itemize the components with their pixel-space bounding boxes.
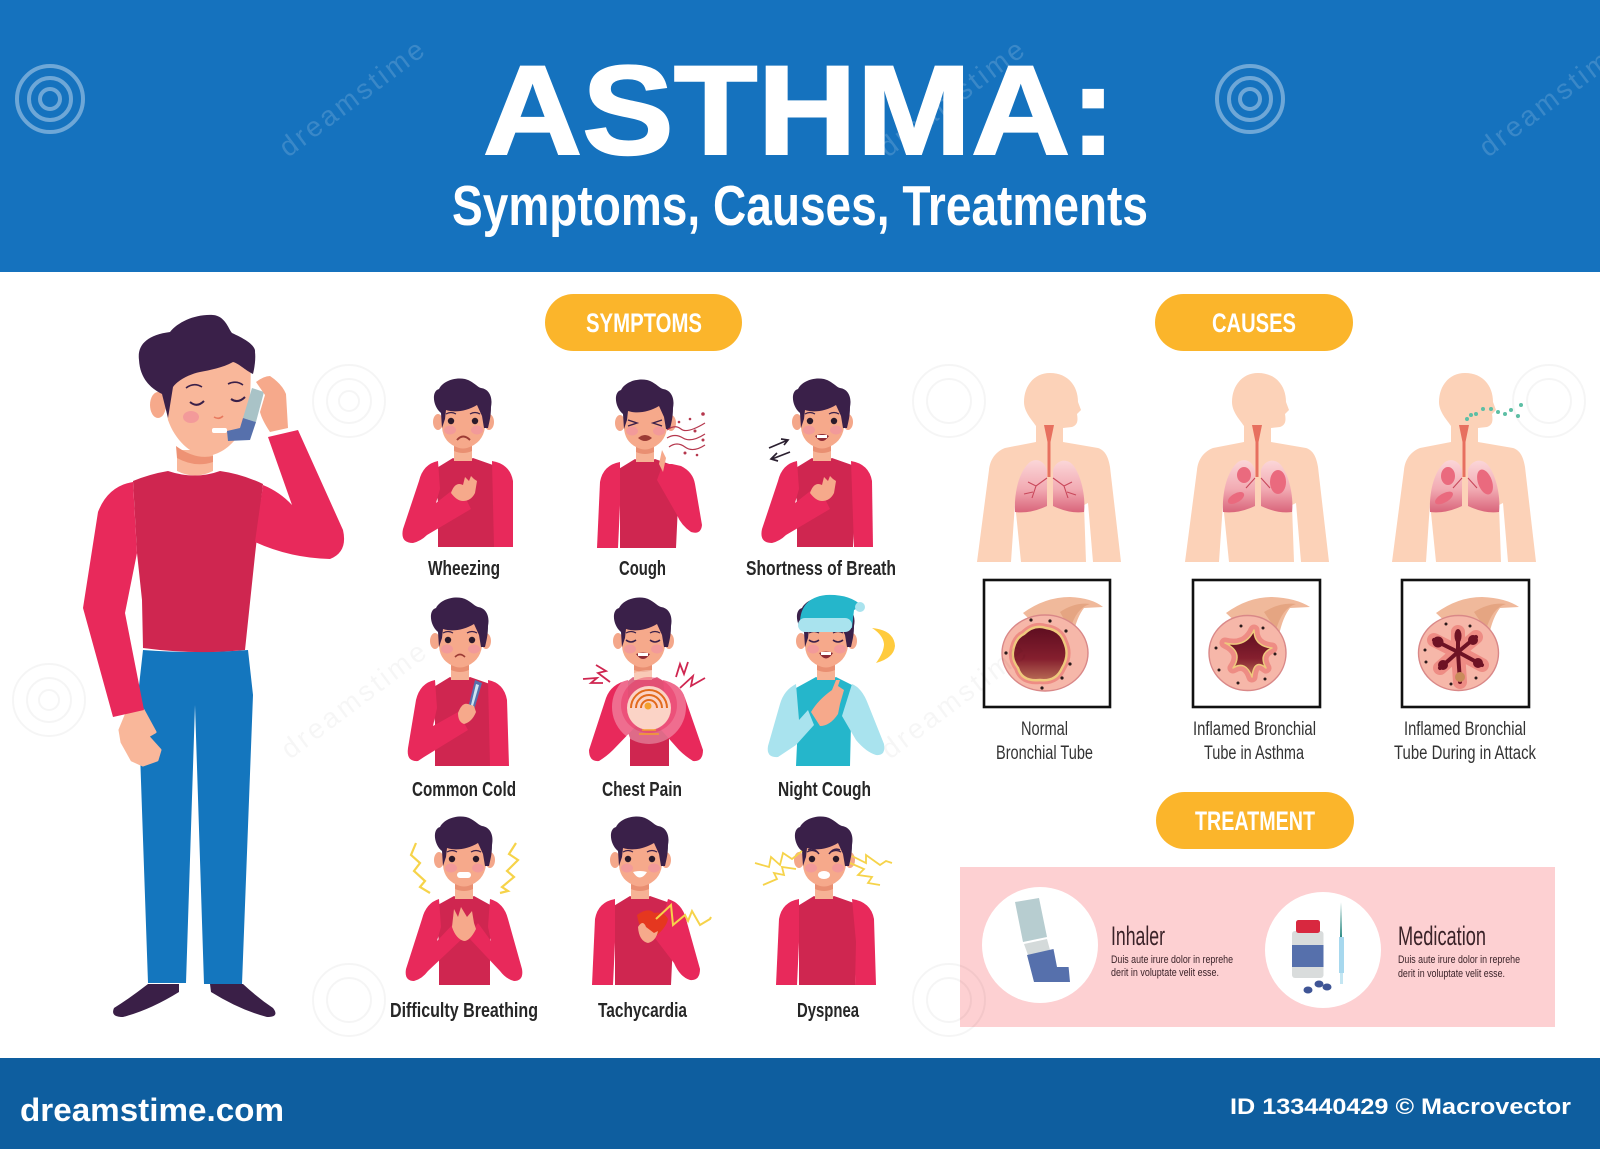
symptoms pill: SYMPTOMS: [586, 308, 702, 338]
symptom: chest pain: [583, 597, 705, 766]
body with inflamed lungs during attack: [1392, 373, 1536, 562]
footer brand: dreamstime.com: [20, 1092, 284, 1128]
symptom label: chest pain: Chest Pain: [602, 779, 682, 801]
symptom: difficulty breathing: [406, 816, 522, 985]
caption: inflamed bronchial tube in asthma: Inflamed Bronchial: [1193, 719, 1316, 740]
stress zigzags: [755, 851, 892, 885]
airborne particles: [1465, 403, 1523, 421]
footer credit: ID 133440429 © Macrovector: [1230, 1094, 1571, 1119]
normal bronchial tube box: [984, 580, 1110, 707]
thermometer: [468, 680, 482, 710]
symptoms pill: [545, 294, 742, 351]
causes pill: CAUSES: [1212, 308, 1296, 338]
moon: [872, 628, 895, 663]
upper hand: [256, 376, 288, 432]
heart: [637, 910, 668, 939]
symptom: dyspnea: [755, 816, 892, 985]
body with inflamed lungs: [1185, 373, 1329, 562]
caption: normal bronchial tube: Normal: [1021, 719, 1068, 740]
cough droplets: [667, 412, 705, 456]
inhaler: [227, 388, 264, 441]
symptom: tachycardia: [592, 816, 711, 985]
watermark text: dreamstime: [273, 32, 432, 163]
body with normal lungs: [977, 373, 1121, 562]
watermark text: dreamstime: [873, 32, 1032, 163]
torso: [133, 471, 263, 652]
inflamed bronchial tube box: [1193, 580, 1320, 707]
symptom label: wheezing: Wheezing: [428, 558, 500, 580]
symptom label: difficulty breathing: Difficulty Breathing: [390, 1000, 538, 1022]
inhaler text: Duis aute irure dolor in reprehe: [1111, 954, 1233, 966]
medication text: Duis aute irure dolor in reprehe: [1398, 954, 1520, 966]
lower hand: [120, 710, 160, 765]
trousers: [138, 650, 253, 984]
symptom label: dyspnea: Dyspnea: [797, 1000, 860, 1022]
symptom label: night cough: Night Cough: [778, 779, 871, 801]
subtitle: Symptoms, Causes, Treatments: [452, 174, 1148, 238]
nightcap: [798, 595, 865, 632]
watermark text: dreamstime: [275, 634, 434, 765]
treatment pill: TREATMENT: [1195, 806, 1315, 836]
title: ASTHMA:: [483, 39, 1116, 181]
symptom: shortness of breath: [761, 378, 873, 547]
inflamed bronchial tube during attack box: [1402, 580, 1529, 707]
caption: inflamed bronchial tube in asthma: [1193, 719, 1316, 764]
shoes: [113, 984, 275, 1017]
inhaler text: derit in voluptate velit esse.: [1111, 967, 1219, 979]
symptom: cough: [597, 379, 705, 548]
symptom: night cough: [768, 595, 895, 766]
medication text: [1398, 921, 1520, 980]
caption: inflamed bronchial tube during attack: Inflamed Bronchial: [1404, 719, 1526, 740]
caption: inflamed bronchial tube in asthma: Tube in Asthma: [1204, 743, 1304, 764]
header band: [0, 0, 1600, 272]
symptom label: common cold: Common Cold: [412, 779, 516, 801]
caption: normal bronchial tube: Bronchial Tube: [996, 743, 1093, 764]
causes pill: [1155, 294, 1353, 351]
symptom: common cold: [408, 597, 509, 766]
stress zigzags: [411, 843, 518, 893]
head: [139, 315, 255, 464]
symptom: wheezing: [402, 378, 513, 547]
caption: inflamed bronchial tube during attack: [1394, 719, 1536, 764]
caption: normal bronchial tube: [996, 719, 1093, 764]
heartbeat zigzag: [656, 905, 711, 925]
icon: medication: [1265, 892, 1381, 1008]
medication text: Medication: [1398, 921, 1486, 951]
inhaler text: Inhaler: [1111, 921, 1165, 951]
lightning: [583, 662, 705, 688]
medication text: derit in voluptate velit esse.: [1398, 968, 1505, 980]
treatment pill: [1156, 792, 1354, 849]
watermark text: dreamstime: [875, 634, 1034, 765]
inhaler text: [1111, 921, 1233, 979]
treatment panel: [960, 867, 1555, 1027]
symptom label: cough: Cough: [619, 558, 666, 580]
symptom label: shortness of breath: Shortness of Breath: [746, 558, 896, 580]
right arm: [255, 430, 344, 559]
watermark text: [273, 32, 1600, 765]
caption: inflamed bronchial tube during attack: Tube During in Attack: [1394, 743, 1536, 764]
icon: inhaler: [982, 887, 1098, 1003]
left arm: [83, 482, 144, 717]
neck: [177, 450, 213, 476]
breath arrows: [769, 439, 790, 461]
large man using inhaler: [83, 315, 344, 1017]
symptom label: tachycardia: Tachycardia: [598, 1000, 688, 1022]
footer band: [0, 1058, 1600, 1149]
pain rings: [612, 670, 686, 744]
